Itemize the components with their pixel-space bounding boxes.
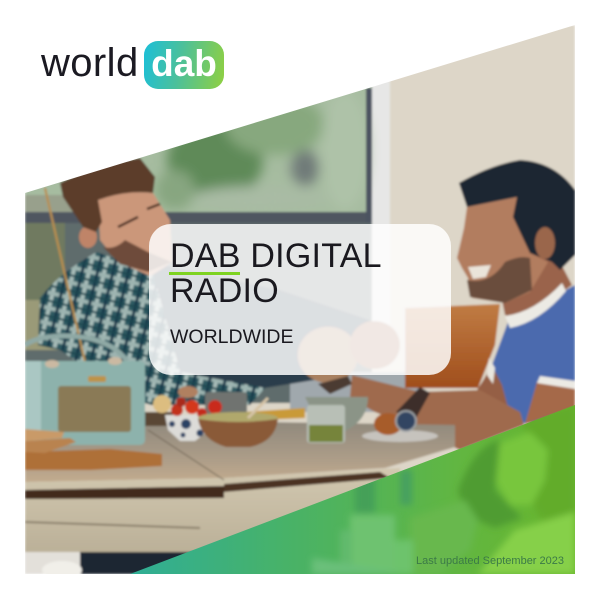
left man: hair	[60, 158, 155, 232]
logo word: world: world	[41, 41, 139, 85]
antenna	[45, 188, 85, 362]
right man: ear	[535, 227, 555, 259]
right man: shirt	[492, 285, 575, 425]
logo: worldDAB	[41, 41, 224, 89]
right man: hair	[459, 160, 575, 270]
title: DAB Digital Radio: RADIO	[170, 272, 279, 310]
left man: shirt	[38, 252, 265, 405]
orange chair	[405, 304, 500, 388]
radio	[25, 336, 127, 361]
woman in the green corner	[522, 406, 571, 516]
title: DAB Digital Radio: DAB DIGITAL	[170, 237, 382, 275]
blue patterned bowl with tomatoes	[165, 415, 212, 441]
subtitle: Worldwide: WORLDWIDE	[170, 326, 294, 348]
title panel	[149, 224, 451, 375]
brown salad bowl	[198, 412, 278, 424]
coffee pot and hands	[298, 327, 358, 383]
title: DAB Digital Radio	[170, 237, 382, 310]
right man: neck and face	[502, 252, 573, 317]
logo badge: dab: dab	[151, 43, 217, 84]
table	[25, 420, 455, 482]
right man: arm and sleeve	[476, 371, 508, 406]
plate, bread roll and watch	[362, 430, 438, 442]
title underline	[169, 272, 240, 275]
radio and jars in the green corner	[350, 515, 395, 574]
glass and grey bowl	[305, 397, 368, 431]
left man: neck and face	[98, 192, 172, 276]
green corner	[130, 405, 575, 574]
plate with food and mug behind bowls	[145, 412, 175, 426]
cutting board and bread	[25, 449, 162, 470]
update date note: Last updated September 2023	[416, 555, 564, 567]
